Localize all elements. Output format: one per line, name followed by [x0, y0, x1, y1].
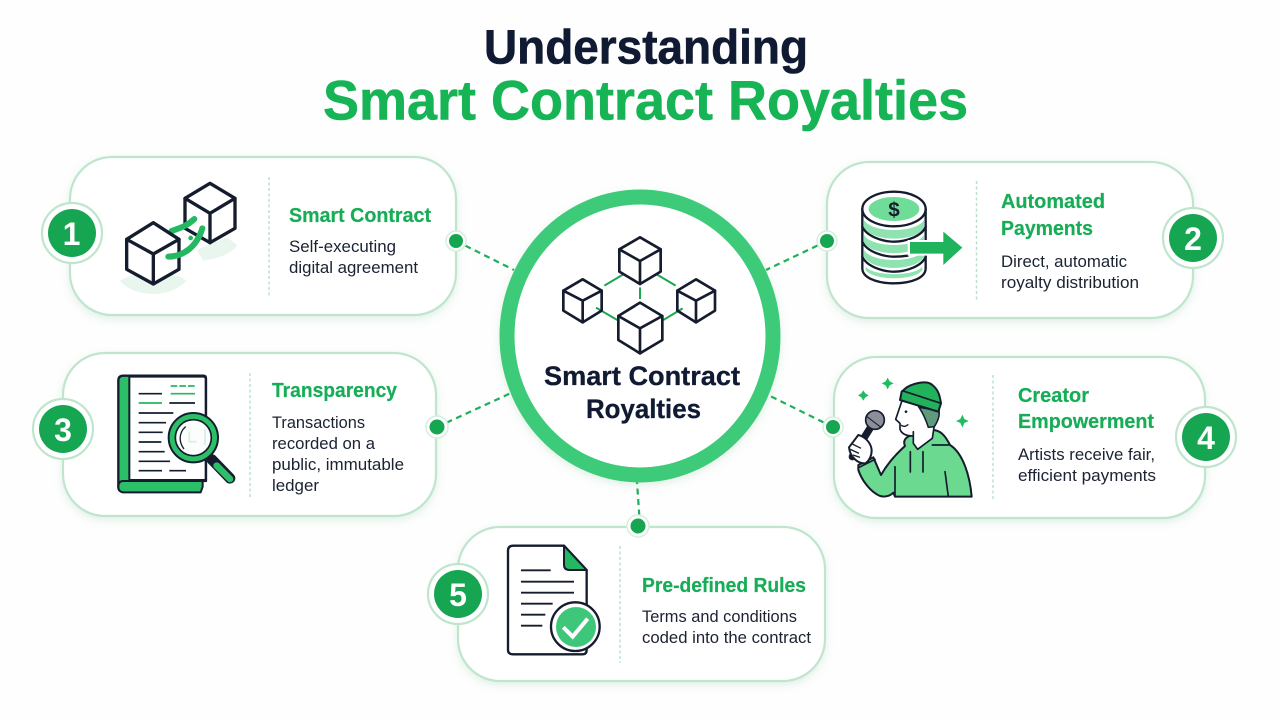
panel: creator empowerment: [823, 357, 1236, 518]
heading: Pre-defined Rules: [642, 575, 806, 597]
icon: linked cubes: [120, 183, 237, 294]
heading: Smart Contract: [289, 205, 431, 227]
title: Smart Contract Royalties: [323, 68, 968, 132]
description: [272, 414, 404, 495]
description: digital agreement: [289, 259, 418, 277]
description: [1018, 446, 1156, 485]
heading: [1018, 385, 1154, 433]
panel: smart contract: [42, 157, 466, 315]
panel: pre-defined rules: [428, 515, 825, 681]
panel: automated payments: [817, 162, 1223, 318]
number badge 2: 2: [1184, 221, 1202, 257]
heading: Automated: [1001, 191, 1105, 213]
icon: document with check: [508, 546, 600, 654]
connector: center to card 4: [768, 395, 833, 427]
number badge 3: 3: [54, 412, 72, 448]
number badge 4: [1176, 407, 1236, 467]
description: coded into the contract: [642, 629, 811, 647]
icon: coin stack with arrow: $: [888, 198, 900, 221]
connector: center to card 5: [637, 482, 640, 526]
heading: [1001, 191, 1105, 240]
description: Direct, automatic: [1001, 253, 1127, 271]
description: efficient payments: [1018, 467, 1156, 485]
description: [289, 238, 418, 277]
panel: transparency: [33, 353, 448, 516]
icon: creator with microphone: [849, 378, 972, 497]
number badge 3: [33, 399, 93, 459]
description: Artists receive fair,: [1018, 446, 1155, 464]
icon: ledger with magnifier: [118, 376, 230, 492]
connector dot: [817, 231, 837, 251]
description: ledger: [272, 477, 320, 495]
heading: Payments: [1001, 218, 1093, 240]
description: recorded on a: [272, 435, 376, 453]
hub label: Smart Contract: [544, 361, 740, 391]
connector dot: [426, 416, 448, 438]
description: Transactions: [272, 414, 365, 432]
connector: center to card 1: [456, 241, 514, 270]
description: royalty distribution: [1001, 274, 1139, 292]
icon: coin stack with arrow: [862, 192, 965, 283]
heading: Empowerment: [1018, 411, 1154, 433]
title: [323, 22, 968, 132]
number badge 4: 4: [1197, 420, 1215, 456]
connector dot: [446, 231, 466, 251]
title: Understanding: [484, 22, 808, 74]
description: Self-executing: [289, 238, 396, 256]
heading: Creator: [1018, 385, 1089, 407]
heading: Transparency: [272, 380, 398, 402]
central hub: [507, 197, 773, 475]
connector: center to card 3: [437, 393, 511, 427]
description: public, immutable: [272, 456, 404, 474]
icon: cube network: [563, 237, 715, 353]
description: Terms and conditions: [642, 608, 797, 626]
number badge 5: [428, 564, 488, 624]
number badge 1: [42, 203, 102, 263]
connector dot: [627, 515, 649, 537]
number badge 2: [1163, 208, 1223, 268]
number badge 1: 1: [63, 216, 80, 252]
description: [1001, 253, 1139, 292]
hub label: Royalties: [586, 394, 701, 424]
description: [642, 608, 811, 647]
number badge 5: 5: [449, 577, 467, 613]
hub label: [544, 361, 740, 424]
connector dot: [823, 417, 843, 437]
connector: center to card 2: [766, 241, 827, 270]
